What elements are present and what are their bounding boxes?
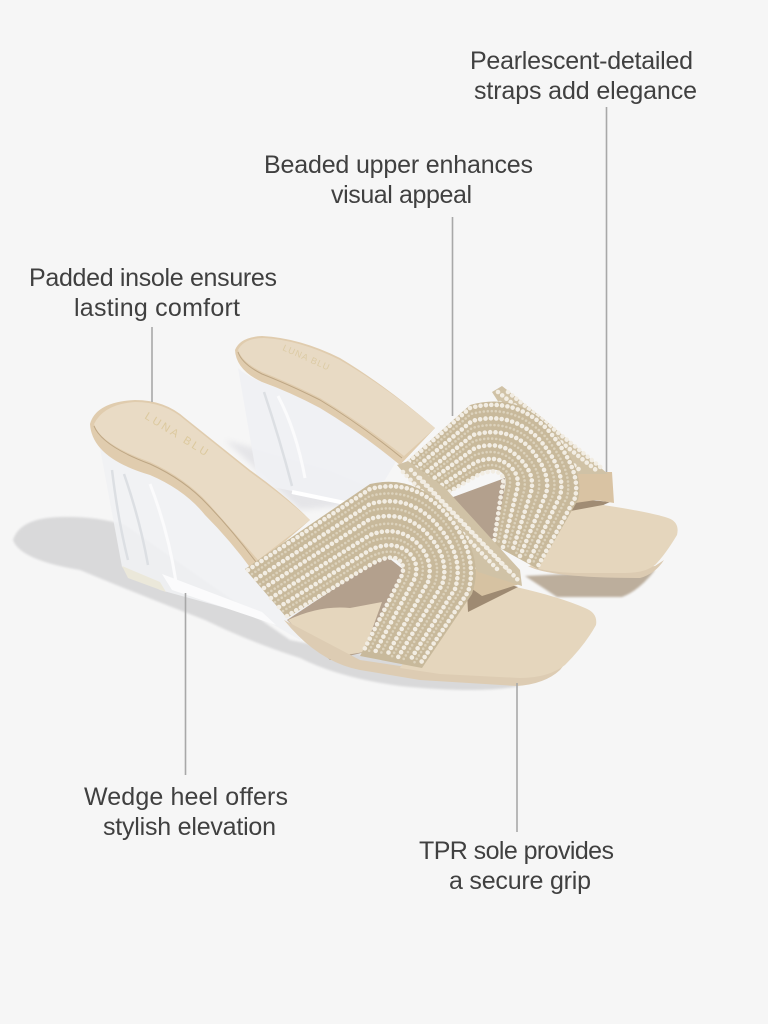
back pearl cross piece	[492, 386, 608, 474]
back strap body	[403, 402, 579, 569]
label: beaded upper: Beaded upper enhances	[264, 151, 533, 179]
label: beaded upper	[264, 151, 533, 209]
back insole	[235, 336, 435, 465]
front insole: LUNA BLU	[142, 410, 210, 459]
label: beaded upper: visual appeal	[331, 181, 472, 209]
leader line: beaded upper	[452, 217, 454, 416]
shadows on the floor	[13, 440, 655, 690]
back wedge heel	[238, 368, 400, 503]
label: TPR sole: a secure grip	[449, 867, 591, 895]
label: TPR sole	[419, 837, 614, 895]
front forefoot and toe	[284, 555, 596, 686]
label: pearlescent straps: Pearlescent-detailed	[470, 47, 693, 75]
back forefoot and toe	[445, 478, 678, 578]
leader line: padded insole	[151, 327, 153, 402]
label: pearlescent straps: straps add elegance	[474, 77, 697, 105]
back insole: LUNA BLU	[281, 343, 331, 372]
back sandal	[235, 336, 678, 578]
label: wedge heel	[84, 783, 288, 841]
back strap tab	[574, 472, 614, 503]
label: wedge heel: Wedge heel offers	[84, 783, 288, 811]
label: padded insole	[29, 264, 277, 322]
front strap tab	[468, 566, 520, 596]
leader line: TPR sole	[516, 683, 518, 832]
label: padded insole: Padded insole ensures	[29, 264, 277, 292]
label: padded insole: lasting comfort	[74, 294, 240, 322]
leader line: pearlescent straps	[606, 107, 608, 472]
front strap body	[245, 482, 476, 668]
front sandal	[90, 400, 596, 686]
label: pearlescent straps	[470, 47, 697, 105]
front insole	[90, 400, 310, 570]
front pearl cross piece	[397, 461, 522, 586]
front wedge heel	[100, 448, 340, 640]
label: wedge heel: stylish elevation	[103, 813, 276, 841]
leader line: wedge heel	[184, 593, 186, 775]
label: TPR sole: TPR sole provides	[419, 837, 614, 865]
